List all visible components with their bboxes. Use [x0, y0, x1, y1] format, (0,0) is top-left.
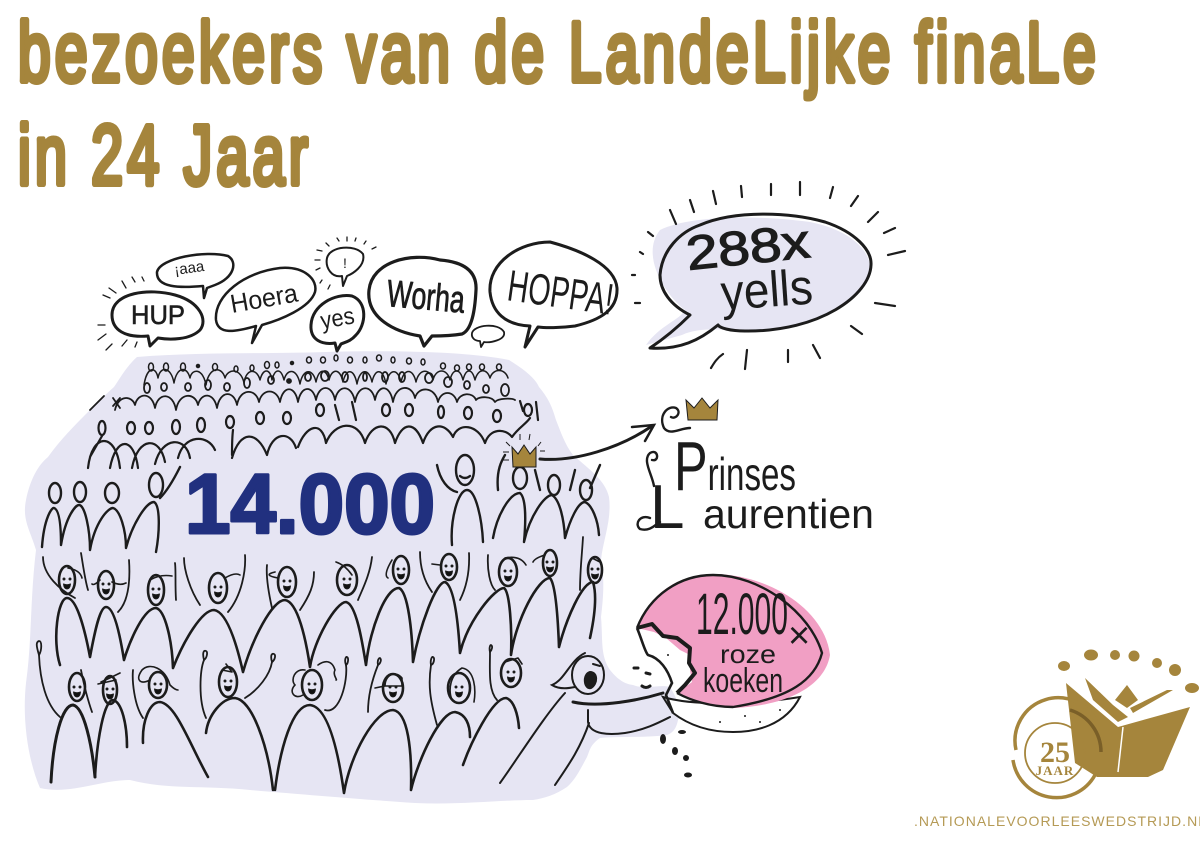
icon: gold crown in crowd: [503, 434, 545, 467]
label: Prinses Laurentien: L: [650, 473, 684, 542]
bubble: Worha: Worha: [385, 273, 467, 322]
label: Prinses Laurentien: aurentien: [703, 491, 874, 537]
crumbs: [660, 654, 781, 778]
bubble: jaaa: ¡aaa: [173, 258, 206, 279]
bubble: small exclamation: !: [343, 255, 347, 271]
big number: 14.000: [185, 457, 435, 551]
bubble: Hoera: [216, 268, 315, 343]
logo book: [1066, 678, 1190, 777]
cake pink top: [637, 574, 830, 708]
cake with girl: ×: [788, 615, 810, 657]
website url: .NATIONALEVOORLEESWEDSTRIJD.NL: [914, 813, 1200, 829]
row 3: [42, 455, 600, 552]
label: Prinses Laurentien: [638, 398, 874, 542]
cake text: 12.000: [696, 582, 788, 647]
bubble: yes: [311, 296, 364, 351]
row 6: back row: [144, 355, 508, 385]
logo book spine: [1118, 727, 1123, 772]
icon: crown: [686, 398, 718, 420]
label: Prinses Laurentien: Prinses: [674, 427, 796, 505]
logo stamp: 25: [1040, 736, 1070, 769]
speech bubbles: [112, 242, 617, 351]
row 2: [43, 537, 602, 672]
logo dots: [1058, 650, 1199, 693]
girl face marks: [634, 668, 650, 688]
cake with girl: koeken: [703, 662, 783, 700]
cake with girl: roze: [720, 639, 776, 669]
row 5: [90, 371, 515, 410]
title: [18, 5, 1100, 202]
cake with girl: [500, 574, 830, 785]
bite edge: [637, 624, 695, 693]
bubble: Hoera: Hoera: [228, 277, 301, 319]
bubble: HOPPA: [490, 242, 617, 347]
title: in 24 Jaar: [18, 108, 312, 202]
crowd: [37, 355, 602, 793]
logo stamp: [1013, 698, 1101, 798]
rays around callout: [632, 182, 905, 369]
bubble: HOPPA: HOPPA!: [505, 261, 616, 325]
logo stamp: JAAR: [1036, 763, 1074, 778]
arrow to Prinses Laurentien: [540, 425, 654, 459]
callout: 288x yells: 288x: [684, 215, 812, 281]
rays around small bubbles: [98, 237, 376, 350]
cake base: [663, 697, 800, 732]
bubble: small empty: [472, 326, 504, 347]
callout: 288x yells: [632, 182, 905, 369]
bubble: HUP: HUP: [131, 300, 185, 330]
row 1: front row: [37, 641, 522, 793]
bubble: yes: yes: [318, 302, 357, 335]
callout: 288x yells: yells: [719, 259, 815, 321]
row 4: [88, 401, 538, 468]
girl: [500, 653, 670, 785]
bubble: Worha: [369, 257, 476, 346]
logo: [1013, 650, 1199, 798]
bubble: small exclamation: [327, 248, 363, 286]
bubble: HUP: [112, 292, 203, 346]
bubble: jaaa: [157, 254, 233, 298]
crowd background: [25, 351, 680, 803]
